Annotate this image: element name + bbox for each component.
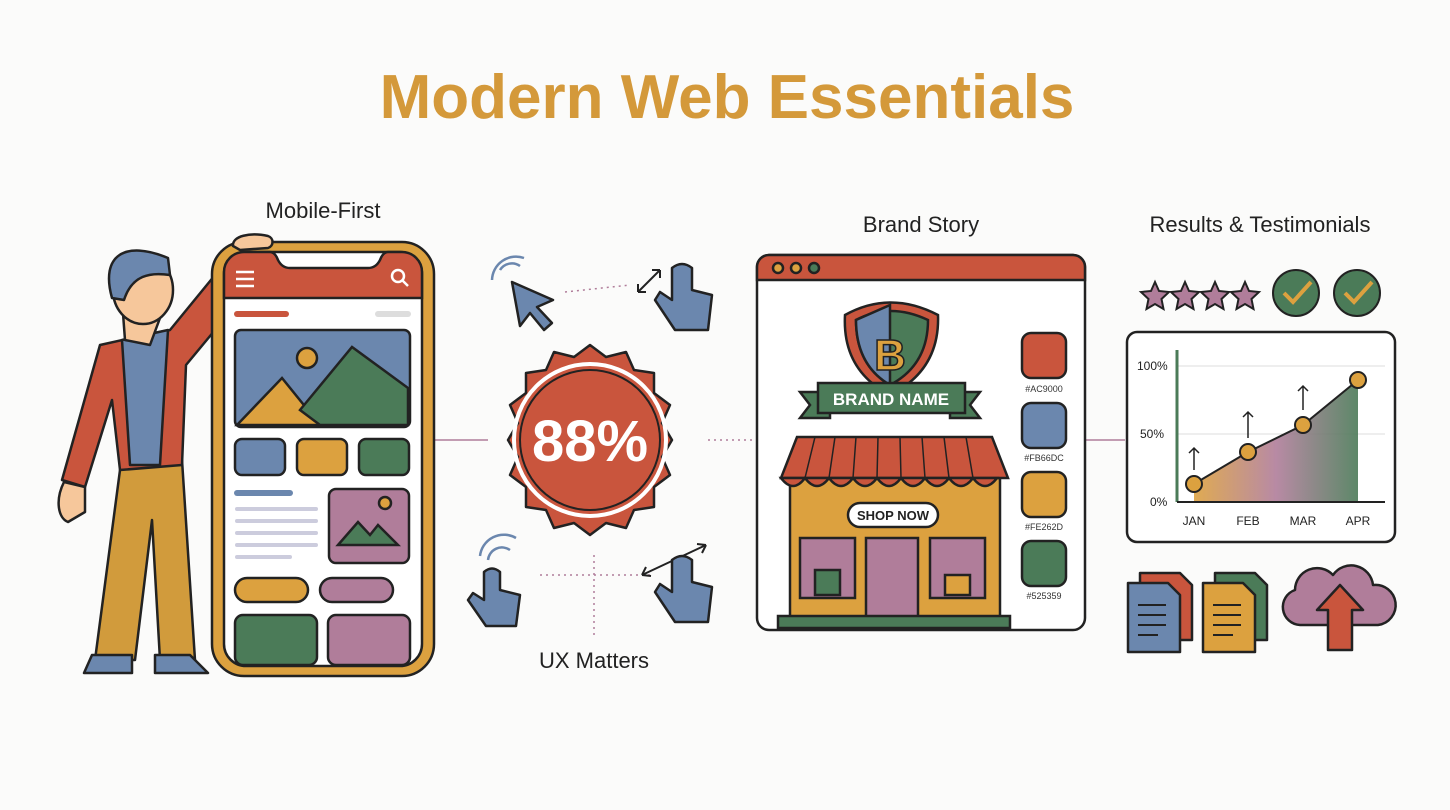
icons: cursors and hands: [468, 257, 712, 626]
badge 88%: 88%: [532, 409, 648, 474]
swatch labels: #FE262D: [1025, 522, 1064, 532]
phone: [212, 234, 434, 676]
shield logo: [845, 302, 938, 395]
badge 88%: [508, 345, 672, 535]
swatch labels: #525359: [1026, 591, 1062, 601]
heading: Mobile-First: Mobile-First: [266, 198, 380, 223]
title: Modern Web Essentials: [380, 63, 1074, 132]
chart: 50%: [1140, 427, 1164, 441]
swatches: [1022, 333, 1066, 378]
swatch labels: #FB66DC: [1024, 453, 1064, 463]
chart: FEB: [1236, 514, 1260, 528]
heading: Results & Testimonials: Results & Testimonials: [1150, 212, 1370, 237]
chart: 0%: [1150, 495, 1168, 509]
brand story window: B: [874, 331, 906, 380]
chart: MAR: [1290, 514, 1317, 528]
connector lines: [434, 285, 1125, 635]
store: [790, 478, 1000, 618]
chart: [1127, 332, 1395, 542]
heading: UX Matters: UX Matters: [539, 648, 649, 673]
chart: 100%: [1137, 359, 1168, 373]
stars and checks: [1141, 270, 1380, 316]
brand story window: SHOP NOW: [857, 508, 930, 523]
person: [59, 251, 215, 673]
brand story window: [757, 255, 1085, 630]
chart: JAN: [1183, 514, 1205, 528]
swatch labels: #AC9000: [1025, 384, 1063, 394]
swatch labels: [1024, 384, 1064, 601]
documents and cloud: [1128, 565, 1396, 652]
heading: Brand Story: Brand Story: [863, 212, 979, 237]
brand story window: BRAND NAME: [833, 390, 949, 409]
chart: APR: [1346, 514, 1371, 528]
